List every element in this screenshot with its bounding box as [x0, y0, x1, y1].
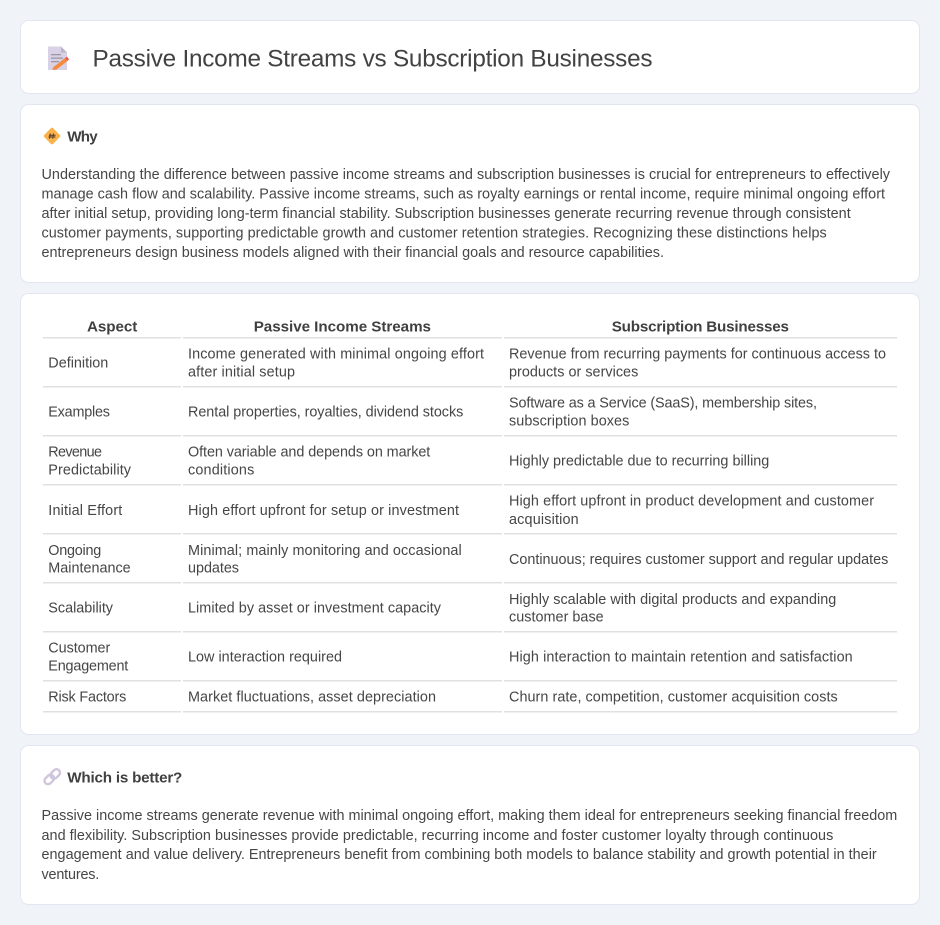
row: initial effort: High effort upfront in product development and customer [509, 494, 874, 510]
text block: why paragraph: after initial setup, providing long-term financial stability. Subscription businesses generate recurring revenue through consistent [42, 206, 851, 222]
row: ongoing maintenance: Ongoing [48, 543, 101, 559]
row: definition [48, 346, 886, 381]
text block: which is better paragraph: engagement and value delivery. Entrepreneurs benefit from combining both models to balance stability and growth potential in their [42, 847, 877, 863]
row: ongoing maintenance: updates [188, 561, 239, 577]
row: ongoing maintenance [48, 543, 888, 577]
row: customer engagement [48, 641, 853, 675]
row: customer engagement: Engagement [48, 659, 128, 675]
text block: why paragraph: customer payments, supporting predictable growth and customer retention strategies. Recognizing these distinctions helps [42, 226, 827, 242]
row: customer engagement: Low interaction required [188, 650, 342, 666]
row: risk factors: Churn rate, competition, customer acquisition costs [509, 690, 838, 706]
table header row: Subscription Businesses [612, 319, 789, 336]
row: scalability [48, 592, 836, 626]
row: examples: Examples [48, 405, 110, 421]
row: customer engagement: High interaction to maintain retention and satisfaction [509, 650, 853, 666]
row: definition: Revenue from recurring payments for continuous access to [509, 346, 886, 362]
row: scalability: Limited by asset or investment capacity [188, 601, 442, 617]
title: Passive Income Streams vs Subscription Businesses [92, 46, 652, 73]
row: revenue predictability: conditions [188, 463, 254, 479]
row: ongoing maintenance: Continuous; requires customer support and regular updates [509, 552, 888, 568]
text block: which is better paragraph: ventures. [42, 867, 99, 883]
text block: why paragraph [42, 167, 891, 261]
table header row: Aspect [87, 319, 137, 336]
row: initial effort [48, 494, 874, 528]
panel: header [20, 20, 920, 94]
row: ongoing maintenance: Minimal; mainly monitoring and occasional [188, 543, 462, 559]
row: examples: subscription boxes [509, 414, 629, 430]
row: revenue predictability: Often variable and depends on market [188, 445, 430, 461]
heading: why: Why [67, 129, 98, 146]
text block: why paragraph: entrepreneurs design business models aligned with their financial goals and resource capabilities. [42, 245, 664, 261]
row: risk factors: Risk Factors [48, 690, 126, 706]
heading: which is better: Which is better? [67, 770, 182, 787]
table header row [87, 319, 789, 336]
icon: document with pencil [48, 46, 69, 70]
row: initial effort: acquisition [509, 512, 579, 528]
text block: which is better paragraph [42, 808, 897, 883]
row: initial effort: High effort upfront for setup or investment [188, 503, 459, 519]
icon: chain link [43, 768, 61, 786]
row: initial effort: Initial Effort [48, 503, 122, 519]
row: revenue predictability: Highly predictable due to recurring billing [509, 454, 769, 470]
row: scalability: Scalability [48, 601, 114, 617]
row: scalability: customer base [509, 610, 604, 626]
row: definition: Definition [48, 356, 108, 372]
row: revenue predictability: Revenue [48, 445, 102, 461]
text block: which is better paragraph: and flexibility. Subscription businesses provide predictable, recurring income and foster customer loyalty through continuous [42, 828, 833, 844]
text block: which is better paragraph: Passive income streams generate revenue with minimal ongoing effort, making them ideal for entrepreneurs seeking financial freedom [42, 808, 897, 824]
row: risk factors [48, 690, 838, 706]
row: examples [48, 396, 817, 430]
row: risk factors: Market fluctuations, asset depreciation [188, 690, 436, 706]
row: customer engagement: Customer [48, 641, 111, 657]
row: definition: products or services [509, 365, 638, 381]
panel: why [20, 104, 920, 282]
row: definition: Income generated with minimal ongoing effort [188, 346, 484, 362]
text block: why paragraph: Understanding the difference between passive income streams and subscription businesses is crucial for entrepreneurs to effectively [42, 167, 891, 183]
row: revenue predictability: Predictability [48, 463, 132, 479]
row: ongoing maintenance: Maintenance [48, 561, 131, 577]
table header row: Passive Income Streams [254, 319, 431, 336]
text block: why paragraph: manage cash flow and scalability. Passive income streams, such as royalty earnings or rental income, require minimal ongoing effort [42, 186, 885, 202]
row: examples: Rental properties, royalties, dividend stocks [188, 405, 463, 421]
row: scalability: Highly scalable with digital products and expanding [509, 592, 836, 608]
panel: which is better [20, 746, 920, 904]
panel: comparison table [20, 294, 920, 734]
icon: orange diamond sign [43, 127, 61, 145]
row: examples: Software as a Service (SaaS), membership sites, [509, 396, 817, 412]
row: revenue predictability [48, 445, 769, 479]
row: definition: after initial setup [188, 365, 295, 381]
